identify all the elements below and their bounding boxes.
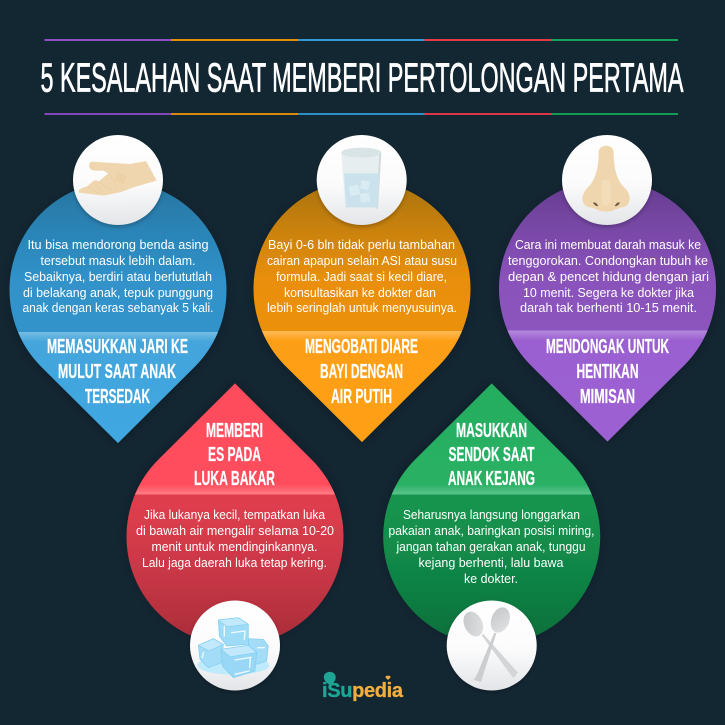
green heading: ANAK KEJANG [448,468,535,490]
purple drop shape [499,180,716,442]
logo: iSupedia: iSupedia [322,680,404,702]
red body text: di bawah air mengalir selama 10-20 [136,523,334,538]
orange heading: BAYI DENGAN [320,361,403,383]
blue body text: Itu bisa mendorong benda asing [28,237,208,252]
blue body text: tersebut masuk lebih dalam. [40,253,196,268]
panel: orange drop, diare [254,135,470,442]
blue heading: TERSEDAK [85,386,150,408]
panel: blue drop, jari ke mulut [10,135,227,443]
orange body text: cairan apapun selain ASI atau susu [267,253,457,268]
icon: nose [562,135,652,225]
purple body text: depan & pencet hidung dengan jari [508,269,709,284]
green body text: Seharusnya langsung longgarkan [403,507,580,522]
red heading: ES PADA [208,444,261,466]
purple body text: Cara ini membuat darah masuk ke [515,237,701,252]
icon: crossed spoons [447,600,537,690]
panel: red drop, luka bakar [126,384,344,690]
purple body text [508,237,709,315]
panel: green drop, sendok [383,384,600,690]
orange body text: lebih seringlah untuk menyusuinya. [267,300,457,315]
red body text: menit untuk mendinginkannya. [152,539,318,554]
purple heading: MIMISAN [580,386,635,408]
blue body text: Sebaiknya, berdiri atau berlututlah [24,269,212,284]
orange body text [267,237,457,315]
green drop shape [383,384,600,645]
green heading [448,420,535,490]
icon: ice cubes [190,600,280,690]
green heading: MASUKKAN [456,420,527,442]
icon: glass of water [317,135,407,225]
blue body text: di belakang anak, tepuk punggung [23,285,213,300]
orange body text: formula. Jadi saat si kecil diare, [276,269,447,284]
green body text [388,507,594,586]
blue body text [22,237,214,315]
green heading: SENDOK SAAT [448,444,534,466]
purple body text: darah tak berhenti 10-15 menit. [520,300,697,315]
red heading: MEMBERI [206,420,263,442]
purple heading [546,336,669,408]
green body text: pakaian anak, baringkan posisi miring, [388,523,594,538]
bottom rainbow rule [44,113,678,115]
top rainbow rule [44,39,678,41]
orange heading [305,336,418,408]
purple body text: 10 menit. Segera ke dokter jika [523,285,695,300]
red heading [194,420,275,490]
blue heading [47,336,188,408]
red body text: Jika lukanya kecil, tempatkan luka [144,507,326,522]
icon: hand [73,135,163,225]
purple body text: tenggorokan. Condongkan tubuh ke [508,253,708,268]
orange body text: konsultasikan ke dokter dan [284,285,436,300]
purple heading: HENTIKAN [576,361,638,383]
panel: purple drop, mimisan [499,135,716,442]
blue heading: MEMASUKKAN JARI KE [47,336,188,358]
green body text: kejang berhenti, lalu bawa [418,555,564,570]
red body text: Lalu jaga daerah luka tetap kering. [142,555,327,570]
orange heading: MENGOBATI DIARE [305,336,418,358]
blue drop shape [10,181,227,443]
red drop shape [126,384,344,645]
orange drop shape [254,180,470,442]
orange heading: AIR PUTIH [331,386,392,408]
green body text: ke dokter. [464,571,518,586]
red body text [136,507,334,570]
orange body text: Bayi 0-6 bln tidak perlu tambahan [268,237,455,252]
blue body text: anak dengan keras sebanyak 5 kali. [22,300,214,315]
blue heading: MULUT SAAT ANAK [58,361,176,383]
red heading: LUKA BAKAR [194,468,275,490]
green body text: jangan tahan gerakan anak, tunggu [396,539,586,554]
